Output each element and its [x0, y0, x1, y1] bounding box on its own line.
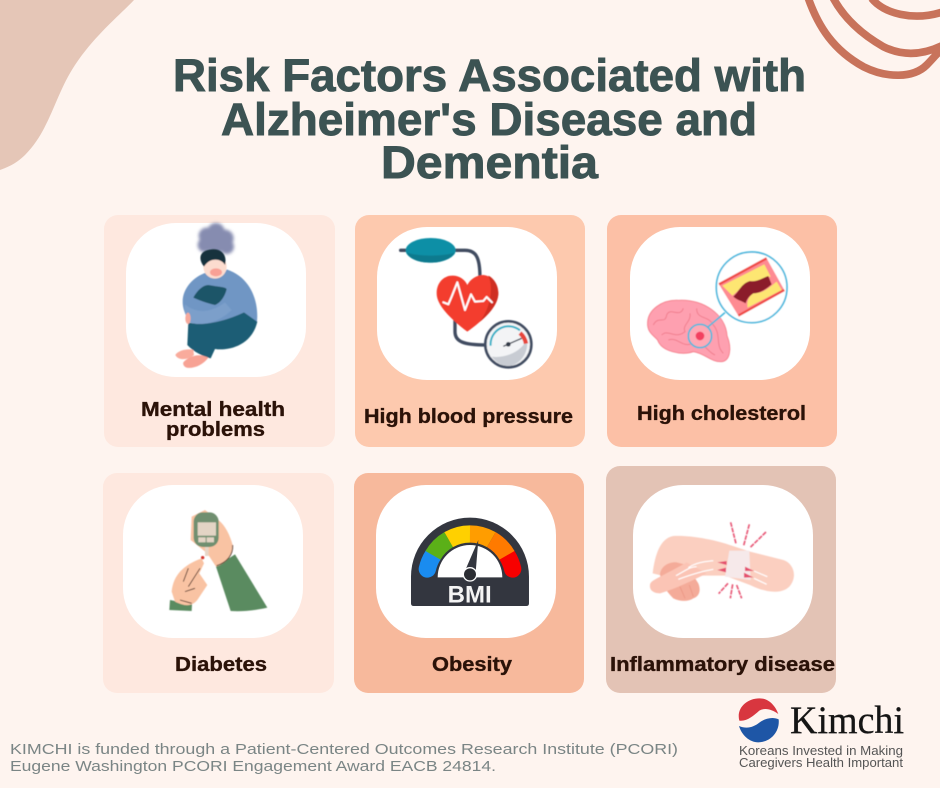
title: Alzheimer's Disease and [221, 94, 757, 145]
title: Dementia [381, 137, 599, 188]
tagline: Caregivers Health Important [739, 756, 904, 770]
panel: diabetes [103, 473, 334, 693]
panel: high cholesterol [607, 215, 837, 447]
panel: high blood pressure [355, 215, 585, 447]
tagline: Koreans Invested in Making [739, 744, 903, 758]
tagline [739, 744, 904, 770]
label [141, 399, 285, 441]
icon: person sitting under a cloud [175, 223, 257, 368]
footer funding note: KIMCHI is funded through a Patient-Centered Outcomes Research Institute (PCORI) [10, 741, 678, 758]
label: Diabetes [175, 654, 267, 676]
icon: bandaged inflamed wrist [650, 522, 794, 601]
label: problems [166, 419, 265, 441]
panel: inflammatory disease [606, 466, 836, 693]
label: Inflammatory disease [610, 654, 835, 676]
wordmark: Kimchi [790, 699, 904, 742]
label: Obesity [432, 654, 513, 676]
icon: red and blue clasped hands [739, 698, 779, 742]
panel: mental health problems [104, 215, 335, 447]
icon: BMI gauge [411, 518, 529, 608]
footer funding note: Eugene Washington PCORI Engagement Award EACB 24814. [10, 758, 496, 775]
icon: brain with magnified clogged artery [648, 252, 787, 362]
title: Risk Factors Associated with [173, 50, 806, 101]
icon: BMI gauge: BMI [448, 581, 492, 608]
label: High cholesterol [637, 403, 806, 425]
label: Mental health [141, 399, 285, 421]
icon: heart with blood pressure cuff and gauge [401, 238, 531, 367]
label: High blood pressure [364, 406, 573, 428]
footer funding note [10, 741, 678, 775]
icon: hands testing blood glucose [169, 510, 267, 611]
panel: obesity [354, 473, 584, 693]
logo: Kimchi [739, 698, 904, 770]
title [173, 50, 806, 188]
